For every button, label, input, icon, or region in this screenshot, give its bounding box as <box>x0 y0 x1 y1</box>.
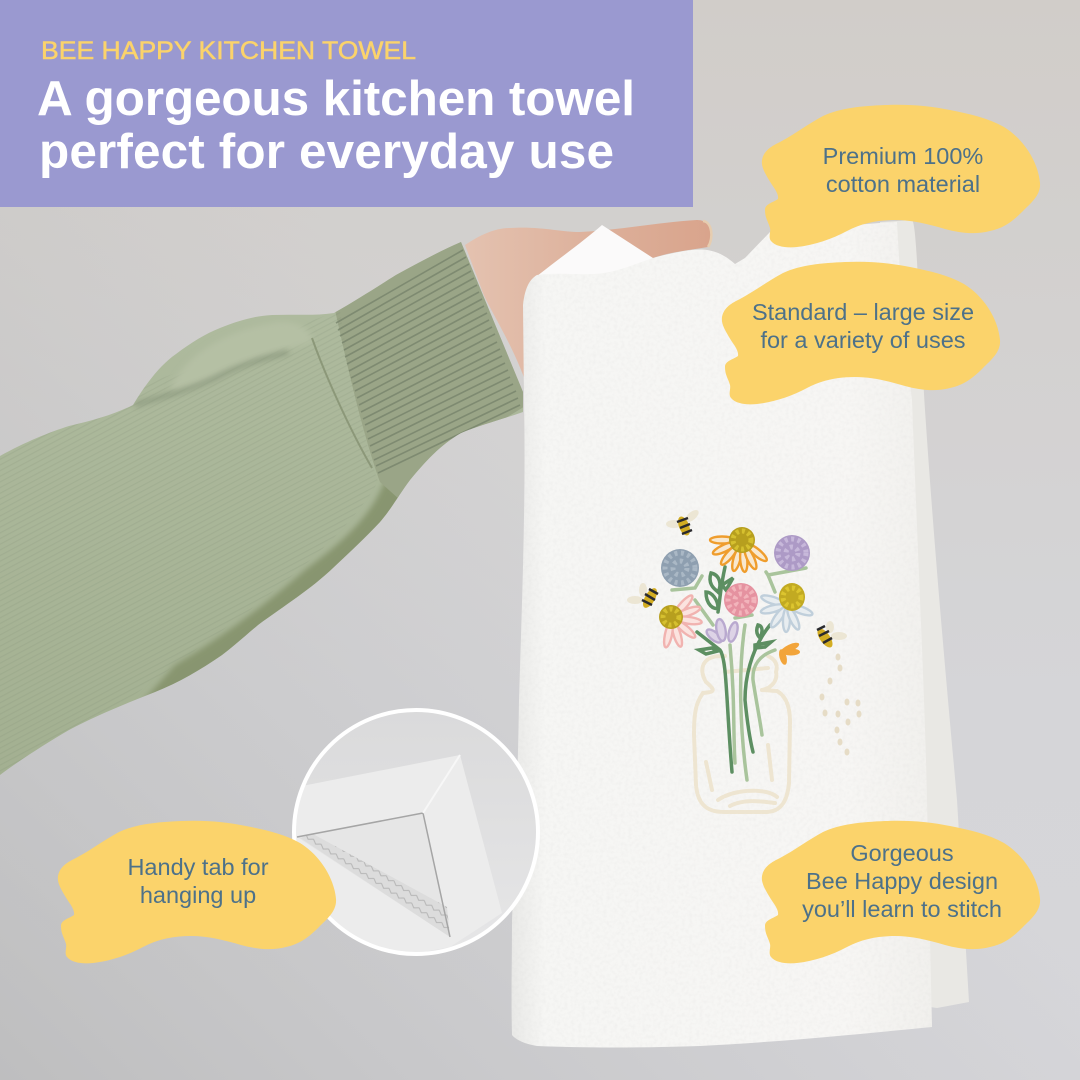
callout: design: Bee Happy design <box>806 868 998 894</box>
leaves <box>699 573 771 654</box>
callout: cotton: cotton material <box>826 171 980 197</box>
pink ball flower <box>724 583 758 617</box>
white daisy <box>760 583 814 632</box>
callout: cotton <box>762 105 1040 247</box>
bee top <box>666 508 701 537</box>
knit texture <box>294 314 342 354</box>
lilac flower <box>705 618 739 645</box>
callout: tab <box>58 821 336 963</box>
cuff seam <box>312 338 372 468</box>
title line 1: A gorgeous kitchen towel <box>37 71 635 126</box>
callout: tab: Handy tab for <box>127 854 269 880</box>
inset photo: hanging tab <box>280 710 538 960</box>
towel front <box>512 222 932 1048</box>
purple ball flower <box>774 535 810 571</box>
thumbnail <box>703 221 711 247</box>
callout: tab: hanging up <box>140 882 256 908</box>
fold shadow <box>135 352 288 405</box>
blue ball flower <box>661 549 699 587</box>
ribbed cuff <box>336 242 523 498</box>
fold triangle <box>297 813 450 937</box>
small orange flower <box>778 641 801 666</box>
header background <box>0 0 693 207</box>
pink daisy <box>659 593 702 648</box>
sweater sleeve <box>0 230 535 780</box>
callout: cotton: Premium 100% <box>823 143 983 169</box>
folded white corner <box>537 225 653 290</box>
callout: design <box>762 821 1040 963</box>
bee trail <box>820 654 862 756</box>
arm in green sweater <box>0 230 535 780</box>
callout: size: Standard – large size <box>752 299 974 325</box>
title line 2: perfect for everyday use <box>39 124 614 179</box>
callout: size <box>722 262 1000 404</box>
inset background <box>294 710 538 954</box>
callout: design: you’ll learn to stitch <box>802 896 1002 922</box>
herringbone tab <box>300 834 450 937</box>
embroidery: flowers in jar <box>627 508 862 812</box>
callout: size: for a variety of uses <box>760 327 966 353</box>
inset border <box>294 710 538 954</box>
eyebrow: BEE HAPPY KITCHEN TOWEL <box>41 37 416 65</box>
callout: design: Gorgeous <box>850 840 954 866</box>
underside shadow <box>145 484 400 696</box>
inset towel corner <box>296 754 502 937</box>
towel weave texture <box>512 222 932 1048</box>
header panel <box>0 0 693 207</box>
stems <box>672 567 806 780</box>
hand <box>465 220 711 380</box>
bee left <box>627 583 660 610</box>
orange flower <box>710 527 769 572</box>
towel back layer <box>880 220 969 1008</box>
mason jar <box>694 656 790 812</box>
elbow fold highlight <box>172 327 310 389</box>
bee right <box>815 621 847 650</box>
